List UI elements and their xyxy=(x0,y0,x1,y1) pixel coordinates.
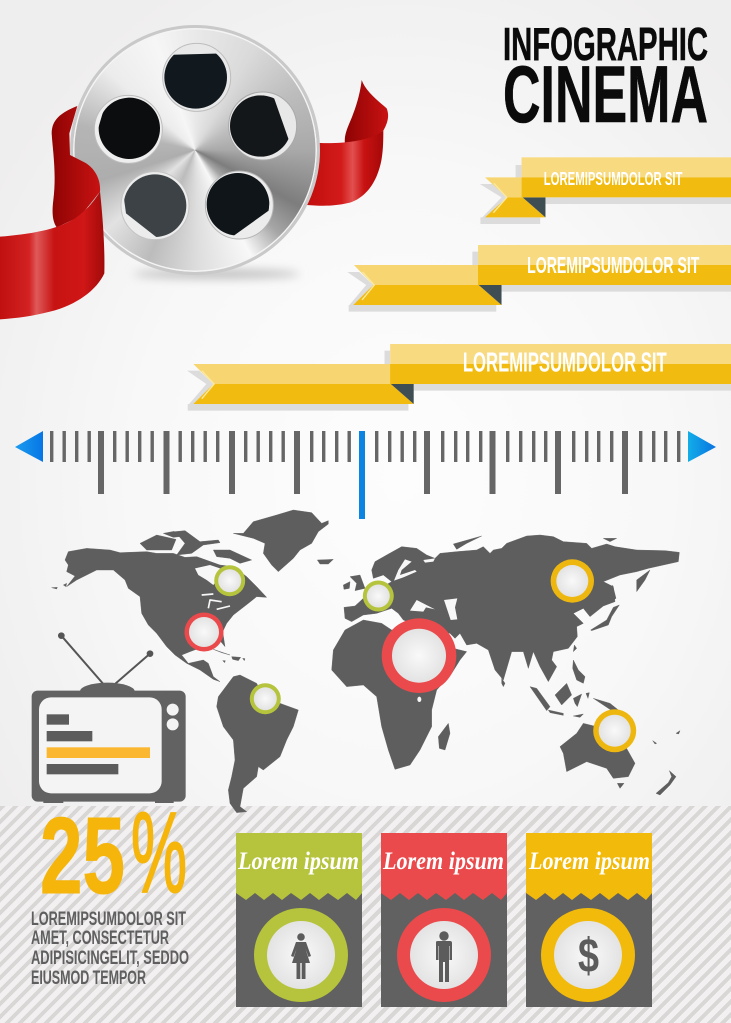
striped footer band xyxy=(0,806,731,1023)
icon: female figure xyxy=(291,933,311,979)
reel metal disc xyxy=(70,25,320,275)
top hole xyxy=(163,43,231,111)
digits: 25 xyxy=(40,795,125,917)
big percentage xyxy=(40,790,187,917)
line 4: EIUSMOD TEMPOR xyxy=(31,968,146,989)
percent sign: % xyxy=(131,790,187,917)
card: green female xyxy=(236,833,362,1007)
card: red male xyxy=(381,833,507,1007)
icon: male figure xyxy=(436,931,452,982)
film reel illustration xyxy=(0,25,388,320)
title xyxy=(503,18,708,140)
map marker: Brazil xyxy=(250,683,281,714)
reel holes and front ribbon xyxy=(0,42,297,320)
card: yellow money xyxy=(526,833,652,1007)
line 1: LOREMIPSUMDOLOR SIT xyxy=(31,909,186,930)
banner 2 xyxy=(347,245,731,312)
paragraph xyxy=(31,909,189,989)
europe asia africa australia xyxy=(332,535,680,795)
icon: television chart xyxy=(32,632,186,803)
ribbon upper fold xyxy=(52,106,100,227)
timeline ruler xyxy=(15,431,716,519)
map marker: Australia xyxy=(593,709,636,752)
map marker: USA xyxy=(184,612,224,652)
card: red male: Lorem ipsum xyxy=(382,848,504,875)
banner 1 xyxy=(480,157,731,224)
icon: dollar sign: $ xyxy=(578,930,599,983)
lower left hole xyxy=(121,172,189,240)
map marker: Canada xyxy=(214,565,245,596)
map marker: Africa xyxy=(382,618,456,693)
ribbon front band xyxy=(0,192,104,319)
banner 3 xyxy=(187,344,731,411)
ribbon behind the reel xyxy=(136,80,388,284)
right hole xyxy=(229,92,297,160)
short ticks xyxy=(50,431,680,462)
long ticks xyxy=(98,431,628,494)
line 2: AMET, CONSECTETUR xyxy=(31,928,169,949)
center marker xyxy=(359,431,365,519)
ribbon banners xyxy=(187,157,731,411)
right arrow xyxy=(688,431,716,462)
left hole xyxy=(94,95,162,163)
card: yellow money: Lorem ipsum xyxy=(528,848,650,875)
americas and greenland xyxy=(52,510,333,813)
map marker: Russia xyxy=(551,559,594,603)
world map xyxy=(52,510,680,813)
card: green female: Lorem ipsum xyxy=(237,848,359,875)
left arrow xyxy=(15,431,43,462)
line 3: ADIPISICINGELIT, SEDDO xyxy=(31,948,189,969)
map marker: Europe xyxy=(363,580,394,612)
lower right hole xyxy=(205,171,273,239)
